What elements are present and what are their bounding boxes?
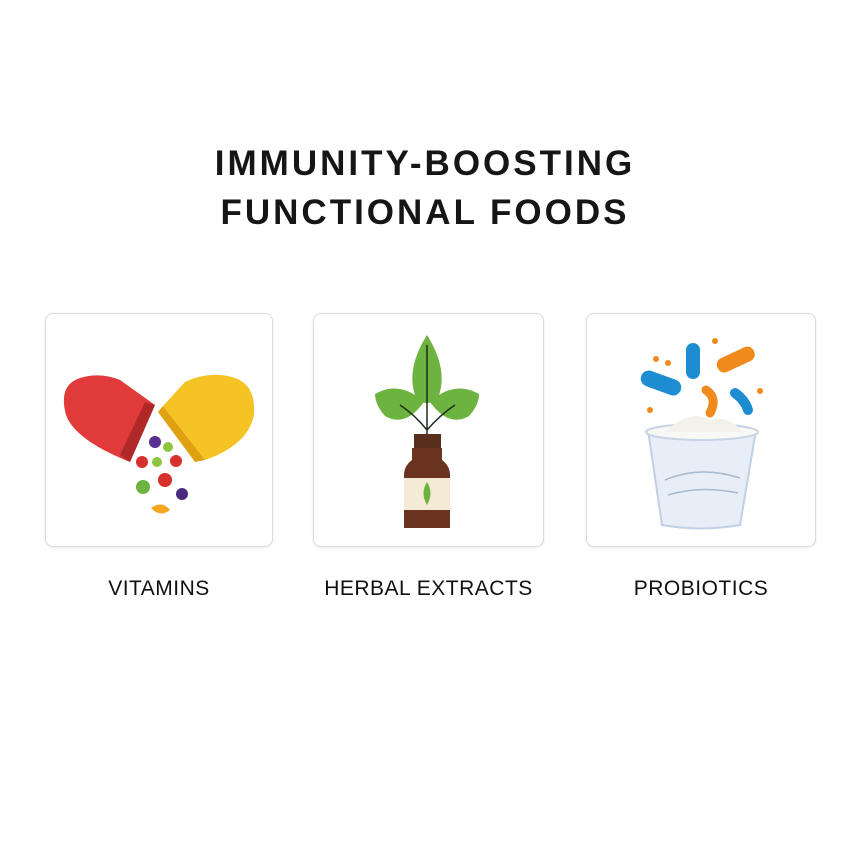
panel: probiotics — [586, 313, 816, 547]
icon: yogurt with probiotics — [639, 338, 763, 528]
label: probiotics: PROBIOTICS — [634, 577, 768, 600]
icon: herbal bottle — [375, 335, 479, 528]
label: herbal extracts: HERBAL EXTRACTS — [324, 577, 533, 600]
title: FUNCTIONAL FOODS — [220, 193, 630, 232]
label: vitamins: VITAMINS — [108, 577, 210, 600]
title — [215, 144, 635, 232]
panel: vitamins — [45, 313, 273, 547]
panel: herbal extracts — [313, 313, 544, 547]
title: IMMUNITY-BOOSTING — [215, 144, 635, 183]
icon: capsule with fruits — [64, 375, 254, 514]
